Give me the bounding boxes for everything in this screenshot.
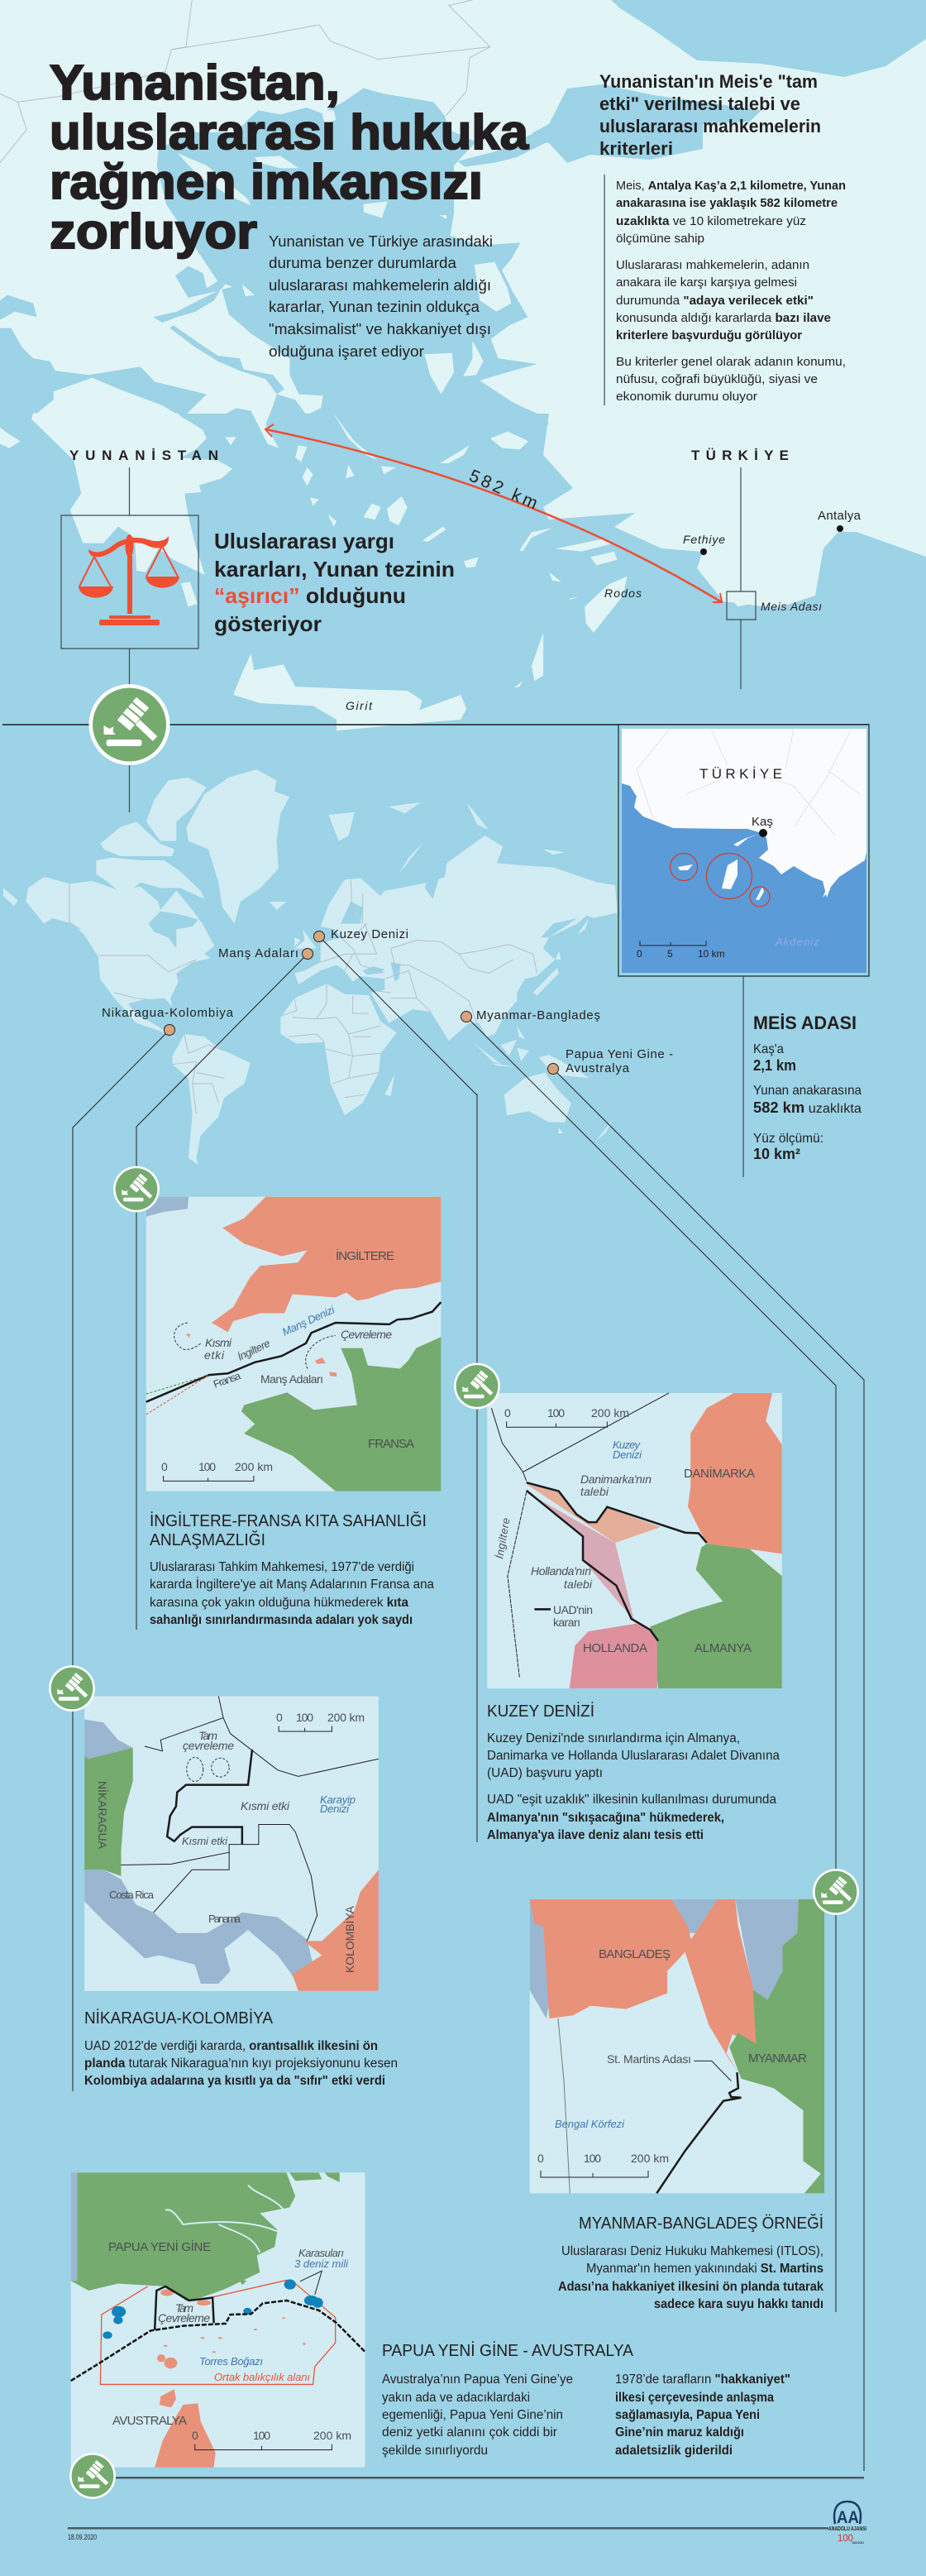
- world map: [3, 769, 617, 1165]
- heading: [150, 1511, 427, 1549]
- title: uluslararası hukuka: [50, 105, 529, 160]
- title: zorluyor: [50, 204, 257, 259]
- map labels: FRANSA: [368, 1437, 414, 1451]
- main horizontal rule: [2, 724, 869, 725]
- body text: [487, 1731, 780, 1842]
- map labels: 100: [584, 2152, 601, 2165]
- marker: Nikaragua-Kolombiya: [102, 1006, 234, 1036]
- body text: kararda İngiltere'ye ait Manş Adalarının Fransa ana: [150, 1577, 434, 1592]
- closing rule: [116, 2477, 864, 2478]
- map labels: talebi: [580, 1485, 609, 1498]
- text: criteria paragraphs: anakarasına ise yaklaşık 582 kilometre: [616, 196, 838, 210]
- map labels: PAPUA YENİ GİNE: [108, 2239, 211, 2254]
- body text column 2: sağlamasıyla, Papua Yeni: [615, 2408, 760, 2422]
- world map labels and markers: [102, 927, 673, 1075]
- body text: planda tutarak Nikaragua'nın kıyı projeksiyonunu kesen: [84, 2056, 398, 2071]
- inset terrain lines: [637, 729, 860, 836]
- text: criteria paragraphs: ekonomik durumu oluyor: [616, 390, 757, 404]
- labels: places: Fethiye: [683, 533, 725, 546]
- body text: Adası’na hakkaniyet ilkesini ön planda tutarak: [558, 2280, 823, 2294]
- panel: Meis Adası facts: 2,1 km: [753, 1057, 796, 1074]
- land masses: [3, 769, 617, 1165]
- map labels: 100: [198, 1460, 216, 1473]
- body text: [558, 2244, 823, 2311]
- labels: places: Girit: [346, 699, 373, 712]
- panel: Meis Adası facts: [742, 976, 862, 1177]
- body text column 1: deniz yetki alanını çok ciddi bir: [382, 2425, 557, 2440]
- marker: Kuzey Denizi: Kuzey Denizi: [331, 927, 408, 941]
- body text: Uluslararası Deniz Hukuku Mahkemesi (ITLOS),: [561, 2244, 823, 2258]
- text: subtitle: uluslararası mahkemelerin aldığı: [269, 276, 491, 294]
- text: subtitle: Yunanistan ve Türkiye arasındaki: [269, 232, 493, 250]
- inset circles: [670, 854, 770, 907]
- title: [50, 55, 529, 259]
- logo: Anadolu Ajansı: AA: [837, 2508, 859, 2527]
- heading: criteria: [599, 71, 821, 159]
- icon: gavel Kuzey Denizi: [454, 1363, 500, 1409]
- text: criteria paragraphs: anakara ile karşı karşıya gelmesi: [616, 275, 797, 290]
- body text: Uluslararası Tahkim Mahkemesi, 1977'de verdiği: [150, 1560, 414, 1574]
- inset labels: TÜRKİYE: [699, 766, 782, 782]
- map labels: 0: [537, 2152, 544, 2165]
- map: Bay of Bengal: [530, 1899, 824, 2193]
- map labels: Tam: [175, 2301, 193, 2315]
- panel: Meis Adası facts: 10 km²: [753, 1146, 800, 1162]
- body text: Almanya'nın "sıkışacağına" hükmederek,: [487, 1811, 724, 1825]
- map labels: HOLLANDA: [583, 1641, 647, 1655]
- labels: places: TÜRKİYE: [691, 448, 789, 463]
- icon: gavel Papua: [69, 2453, 116, 2499]
- map labels: Danimarka'nın: [580, 1472, 652, 1486]
- map labels: UAD'nin: [553, 1603, 593, 1616]
- map: English Channel: [146, 1197, 441, 1491]
- map labels: Bengal Körfezi: [555, 2118, 625, 2130]
- map labels: ALMANYA: [694, 1641, 752, 1655]
- panel: Myanmar-Bangladeş: [530, 1899, 824, 2311]
- map labels: Panama: [208, 1913, 241, 1925]
- body text column 1: [382, 2373, 573, 2458]
- text: criteria paragraphs: durumunda "adaya verilecek etki": [616, 294, 814, 308]
- labels: places: YUNANİSTAN: [69, 448, 218, 463]
- text: criteria paragraphs: uzaklıkta ve 10 kilometrekare yüz: [616, 214, 806, 228]
- panel: Meis Adası facts: 582 km uzaklıkta: [753, 1099, 862, 1116]
- text: criteria paragraphs: nüfusu, coğrafi büyüklüğü, siyasi ve: [616, 372, 818, 386]
- map labels: etki: [204, 1348, 225, 1362]
- map labels: 100: [253, 2429, 270, 2442]
- text: criteria paragraphs: konusunda aldığı kararlarda bazı ilave: [616, 311, 831, 325]
- marker: Myanmar-Bangladeş: Myanmar-Bangladeş: [476, 1008, 600, 1022]
- marker: Manş Adaları: Manş Adaları: [218, 946, 298, 960]
- map: Torres Strait: [71, 2172, 365, 2468]
- icon: gavel Myanmar: [813, 1869, 859, 1915]
- map labels: [493, 1406, 755, 1655]
- marker: Nikaragua-Kolombiya: Nikaragua-Kolombiya: [102, 1006, 234, 1020]
- map labels: Kısmi etki: [182, 1835, 228, 1847]
- text: criteria paragraphs: kriterlere başvurduğu görülüyor: [616, 328, 802, 342]
- labels: places: Meis Adası: [761, 600, 822, 613]
- heading: criteria: uluslararası mahkemelerin: [599, 116, 821, 136]
- inset islands: [678, 859, 764, 900]
- map labels: İNGİLTERE: [336, 1248, 394, 1263]
- map labels: Çevreleme: [341, 1328, 392, 1341]
- body text: karasına çok yakın olduğuna hükmederek kıta: [150, 1596, 408, 1610]
- land: Crete: [233, 654, 466, 730]
- text: subtitle: duruma benzer durumlarda: [269, 254, 457, 271]
- text: criteria paragraphs: Meis, Antalya Kaş’a 2,1 kilometre, Yunan: [616, 179, 846, 193]
- body text column 2: adaletsizlik giderildi: [615, 2444, 733, 2458]
- icon: gavel İngiltere-Fransa: [113, 1166, 160, 1212]
- map labels: 200 km: [235, 1460, 273, 1473]
- borders: [0, 0, 490, 163]
- map labels: Ortak balıkçılık alanı: [214, 2371, 310, 2383]
- body text column 2: 1978’de tarafların "hakkaniyet": [615, 2373, 790, 2387]
- logo: Anadolu Ajansı: [828, 2502, 866, 2545]
- inland water: [148, 866, 577, 982]
- body text: sadece kara suyu hakkı tanıdı: [654, 2297, 823, 2311]
- land: Balkans and Anatolia: [0, 0, 926, 608]
- body text: Danimarka ve Hollanda Uluslararası Adalet Divanına: [487, 1749, 780, 1763]
- body text: [150, 1560, 434, 1627]
- map labels: Costa Rica: [109, 1889, 155, 1901]
- map labels: Denizi: [613, 1448, 642, 1461]
- logo: Anadolu Ajansı: 100: [838, 2532, 853, 2544]
- country borders: [69, 879, 537, 1114]
- map labels: Karayip: [320, 1793, 356, 1806]
- map labels: 0: [276, 1711, 283, 1724]
- map labels: Hollanda'nın: [531, 1564, 591, 1578]
- icon: scales of justice: [79, 534, 179, 625]
- connector lines: [73, 936, 864, 2471]
- inset land: [622, 729, 866, 898]
- map labels: Fransa: [212, 1369, 243, 1391]
- icon: gavel Nikaragua: [49, 1665, 95, 1712]
- heading: KUZEY DENİZİ: [487, 1702, 594, 1721]
- map labels: AVUSTRALYA: [112, 2414, 187, 2428]
- map labels: Tam: [198, 1729, 217, 1742]
- map labels: 100: [296, 1711, 313, 1724]
- map labels: Kısmi: [205, 1336, 232, 1349]
- text: judicial decisions callout: Uluslararası yargı: [214, 529, 394, 553]
- map labels: [96, 1711, 365, 1973]
- logo: Anadolu Ajansı: ANADOLU AJANSI: [828, 2526, 866, 2532]
- panel: Meis inset map: [618, 725, 869, 976]
- date: 18.09.2020: [68, 2533, 97, 2541]
- map labels: KOLOMBİYA: [342, 1905, 356, 1973]
- panel: Nikaragua-Kolombiya: [84, 1697, 398, 2088]
- body text column 2: ilkesi çerçevesinde anlaşma: [615, 2391, 774, 2405]
- body text: Myanmar'ın hemen yakınındaki St. Martins: [586, 2262, 823, 2276]
- heading: criteria: etki" verilmesi talebi ve: [599, 93, 800, 114]
- map labels: 0: [161, 1460, 168, 1473]
- text: subtitle: kararlar, Yunan tezinin oldukça: [269, 298, 480, 315]
- logo: Anadolu Ajansı: 1920-2020: [852, 2540, 865, 2545]
- labels: places: Antalya: [818, 509, 862, 523]
- arc: 582 km distance: [265, 424, 722, 602]
- panel: Kuzey Denizi: [487, 1393, 782, 1842]
- locator lines and boxes: [61, 467, 756, 812]
- water: Marmara: [529, 84, 761, 163]
- text: criteria paragraphs: Bu kriterler genel olarak adanın konumu,: [616, 355, 846, 369]
- text: criteria paragraphs: Uluslararası mahkemelerin, adanın: [616, 258, 809, 272]
- map labels: 200 km: [327, 1711, 365, 1724]
- panel: Meis inset map: Kaş: [752, 815, 773, 829]
- map labels: çevreleme: [183, 1739, 234, 1752]
- body text: UAD 2012'de verdiği kararda, orantısallık ilkesini ön: [84, 2039, 378, 2053]
- map labels: 100: [547, 1406, 565, 1420]
- text: judicial decisions callout: “aşırıcı” olduğunu: [214, 583, 406, 608]
- map labels: NİKARAGUA: [96, 1781, 110, 1850]
- panel: Meis inset map: 0: [637, 948, 642, 960]
- body text: sahanlığı sınırlandırmasında adaları yok saydı: [150, 1613, 413, 1627]
- body text: Kolombiya adalarına ya kısıtlı ya da "sıfır" etki verdi: [84, 2074, 385, 2088]
- panel: Meis Adası facts: Yunan anakarasına: [753, 1084, 862, 1098]
- heading: criteria: Yunanistan'ın Meis'e "tam: [599, 71, 818, 92]
- map: Caribbean: [84, 1697, 379, 1991]
- body text column 1: şekilde sınırlıyordu: [382, 2444, 488, 2458]
- map labels: Manş Denizi: [280, 1303, 337, 1338]
- panel: Papua Yeni Gine - Avustralya: [71, 2172, 790, 2468]
- map labels: Torres Boğazı: [199, 2355, 263, 2368]
- title: rağmen imkansızı: [50, 155, 483, 209]
- body text column 2: Gine’nin maruz kaldığı: [615, 2425, 744, 2440]
- body text: UAD "eşit uzaklık" ilkesinin kullanılması durumunda: [487, 1793, 776, 1807]
- scale bar: [541, 2171, 648, 2177]
- text: subtitle: olduğuna işaret ediyor: [269, 342, 424, 360]
- marker: Papua Yeni Gine - Avustralya: Avustralya: [566, 1061, 630, 1075]
- panel: Meis inset map: 5: [667, 948, 673, 960]
- water: Black Sea: [611, 0, 926, 77]
- map labels: talebi: [564, 1578, 593, 1591]
- heading: NİKARAGUA-KOLOMBİYA: [84, 2009, 273, 2028]
- land: Peloponnese: [0, 413, 236, 606]
- panel: Meis inset map: Akdeniz: [775, 936, 820, 948]
- text: judicial decisions callout: gösteriyor: [214, 611, 322, 636]
- text: criteria paragraphs: [604, 175, 846, 405]
- panel: Meis Adası facts: Kaş'a: [753, 1042, 784, 1056]
- title: Yunanistan,: [50, 55, 340, 110]
- heading: MYANMAR-BANGLADEŞ ÖRNEĞİ: [579, 2214, 823, 2233]
- map labels: [108, 2239, 351, 2442]
- heading: ANLAŞMAZLIĞI: [150, 1530, 265, 1549]
- text: judicial decisions callout: kararları, Yunan tezinin: [214, 557, 455, 582]
- text: criteria paragraphs: ölçümüne sahip: [616, 232, 704, 246]
- map labels: İngiltere: [493, 1517, 513, 1560]
- land: Aegean islands north: [177, 110, 511, 448]
- water: Ionian Sea and gulf: [0, 328, 207, 418]
- labels: places: Rodos: [604, 587, 642, 600]
- body text: Kuzey Denizi'nde sınırlandırma için Almanya,: [487, 1731, 740, 1745]
- panel: Meis Adası facts: MEİS ADASI: [753, 1013, 857, 1033]
- map labels: MYANMAR: [748, 2052, 807, 2066]
- heading: criteria: kriterleri: [599, 138, 673, 159]
- map labels: [161, 1248, 414, 1473]
- heading: İNGİLTERE-FRANSA KITA SAHANLIĞI: [150, 1511, 427, 1530]
- labels: places: [69, 448, 862, 712]
- body text: (UAD) başvuru yaptı: [487, 1766, 603, 1780]
- marker: Papua Yeni Gine - Avustralya: Papua Yeni Gine -: [566, 1047, 673, 1061]
- text: judicial decisions callout: [214, 529, 455, 636]
- body text column 2: [615, 2373, 790, 2458]
- map labels: Denizi: [320, 1803, 350, 1815]
- map labels: St. Martins Adası: [607, 2052, 691, 2066]
- footer rule: [68, 2527, 828, 2530]
- text: subtitle: "maksimalist" ve hakkaniyet dışı: [269, 320, 491, 338]
- map labels: Karasuları: [298, 2247, 344, 2259]
- map labels: 200 km: [631, 2152, 669, 2165]
- panel: Meis inset map: 10 km: [698, 948, 725, 960]
- map labels: 200 km: [591, 1406, 629, 1420]
- map labels: Kuzey: [613, 1439, 642, 1451]
- map: North Sea: [487, 1393, 782, 1688]
- map labels: İngiltere: [236, 1337, 272, 1363]
- map: Aegean region: [0, 0, 926, 812]
- map labels: 0: [192, 2429, 198, 2442]
- map labels: DANİMARKA: [684, 1466, 755, 1481]
- distance label: 582 km: [466, 467, 541, 513]
- marker: Papua Yeni Gine - Avustralya: [547, 1047, 673, 1075]
- body text column 1: yakın ada ve adacıklardaki: [382, 2391, 530, 2405]
- map labels: 3 deniz mili: [294, 2258, 349, 2270]
- body text column 1: egemenliği, Papua Yeni Gine’nin: [382, 2408, 563, 2422]
- text: subtitle: [269, 232, 493, 360]
- panel: İngiltere-Fransa: [146, 1197, 441, 1627]
- map labels: 0: [504, 1406, 511, 1420]
- panel: Meis Adası facts: Yüz ölçümü:: [753, 1132, 823, 1146]
- icon: main gavel: [89, 684, 170, 765]
- water: Aegean Sea: [0, 89, 550, 448]
- map labels: Manş Adaları: [260, 1372, 323, 1386]
- map labels: BANGLADEŞ: [599, 1947, 671, 1961]
- body text column 1: Avustralya’nın Papua Yeni Gine’ye: [382, 2373, 573, 2387]
- map labels: [537, 1947, 807, 2165]
- map labels: Çevreleme: [158, 2311, 210, 2325]
- map labels: kararı: [553, 1616, 580, 1629]
- map labels: 200 km: [313, 2429, 351, 2442]
- body text: Almanya'ya ilave deniz alanı tesis etti: [487, 1828, 704, 1842]
- heading: PAPUA YENİ GİNE - AVUSTRALYA: [382, 2341, 633, 2360]
- map labels: Kısmi etki: [241, 1799, 290, 1812]
- body text: [84, 2039, 398, 2088]
